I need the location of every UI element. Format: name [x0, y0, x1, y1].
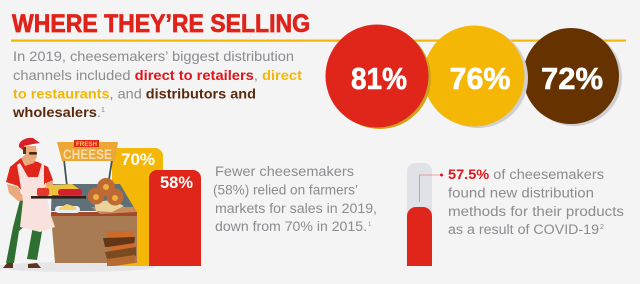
arm [7, 184, 33, 201]
neck and head [21, 146, 37, 166]
stall base [51, 216, 137, 263]
stat circle: red 81%: 81% [351, 61, 407, 96]
moustache [29, 152, 37, 155]
hair [23, 147, 26, 154]
illustration: cheese stall [51, 140, 137, 266]
text block: COVID-19 [448, 167, 624, 237]
stat circle: yellow 76%: 76% [450, 61, 510, 96]
stacked crates [103, 231, 136, 266]
text block: COVID-19: found new distribution [448, 186, 594, 200]
stat circle: yellow 76% [424, 26, 528, 128]
text block: farmers' markets: 1 [368, 222, 372, 228]
stall sign [57, 140, 118, 162]
text block: farmers' markets: markets for sales in 2019, [215, 201, 377, 216]
stat circle: brown 72% [523, 28, 622, 126]
text block: farmers' markets: down from 70% in 2015. [215, 219, 367, 234]
shirt [6, 158, 53, 200]
text block: distribution channels: to restaurants, and distributors and [13, 86, 256, 102]
text block: distribution channels: channels included direct to retailers , direct [13, 67, 302, 83]
forearm [46, 180, 53, 188]
illustration: cheesemaker [3, 138, 86, 268]
bread loaves [88, 178, 124, 206]
bar: 70% in 2015 [112, 148, 163, 266]
apron [17, 163, 55, 232]
text block: farmers' markets: Fewer cheesemakers [215, 164, 354, 179]
stall posts [64, 160, 112, 186]
stat circle: red 81% [326, 24, 431, 129]
shoes [3, 263, 41, 268]
cheese on tray [37, 184, 82, 196]
stall sign: FRESH [76, 142, 97, 148]
stall sign: CHEESE [63, 146, 112, 162]
bar: 58% in 2019 [149, 170, 201, 266]
legs [6, 200, 43, 263]
bar: 58% in 2019: 58% [160, 174, 193, 192]
illustration: ground shadow [0, 262, 155, 272]
text block: farmers' markets [213, 164, 377, 234]
stat circle: brown 72%: 72% [541, 61, 603, 96]
text block: distribution channels: In 2019, cheesemakers’ biggest distribution [13, 48, 294, 64]
text block: distribution channels: 1 [101, 107, 105, 114]
bar: 70% in 2015: 70% [121, 151, 155, 169]
thermometer gauge [407, 163, 443, 266]
cheese board [91, 200, 137, 214]
text block: COVID-19: methods for their products [448, 204, 624, 219]
text block: distribution channels: wholesalers . [12, 104, 101, 120]
cap [19, 138, 40, 150]
serving tray [31, 196, 86, 199]
text block: COVID-19: as a result of COVID-19 [448, 222, 599, 237]
text block: farmers' markets: (58%) relied on farmers’ [213, 182, 358, 198]
stall counter [51, 184, 136, 211]
cheese plate [55, 204, 80, 213]
text block: COVID-19: 57.5% of cheesemakers [448, 167, 604, 182]
text block: COVID-19: 2 [600, 224, 604, 231]
title: WHERE THEY’RE SELLING [12, 10, 310, 38]
text block: distribution channels [12, 48, 302, 120]
heading rule [11, 40, 626, 42]
